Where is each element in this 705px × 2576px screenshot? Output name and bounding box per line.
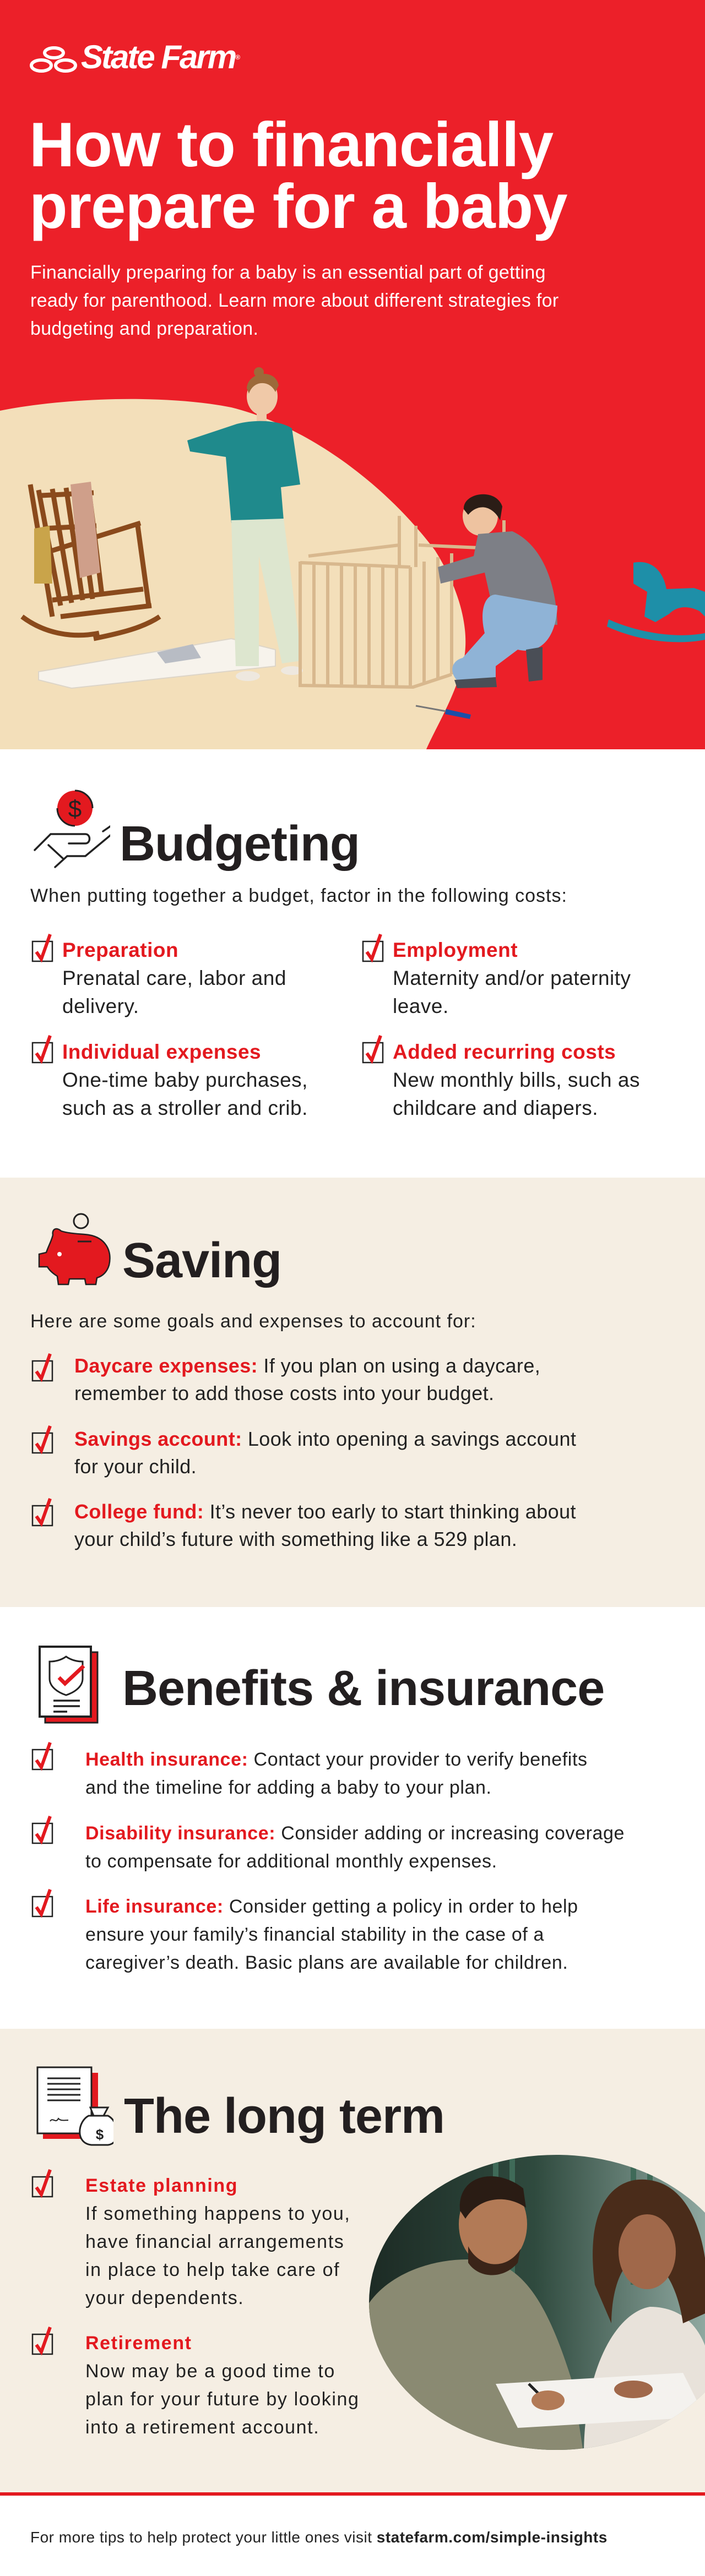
- rocking horse: [633, 562, 705, 622]
- item: retirement: Retirement: [85, 2333, 192, 2354]
- icon: three ovals: [30, 46, 77, 73]
- item: life insurance: [32, 1889, 578, 1973]
- icon: document with money bag: [36, 2067, 113, 2146]
- item: estate planning: your dependents.: [85, 2288, 244, 2308]
- photo: couple planning: [369, 2155, 705, 2450]
- item: daycare: Daycare expenses: If you plan on using a daycare,: [74, 1354, 540, 1377]
- item: disability insurance: to compensate for additional monthly expenses.: [85, 1851, 497, 1872]
- heading: benefits & insurance: Benefits & insurance: [122, 1661, 604, 1716]
- icon: document with money bag: $: [96, 2126, 104, 2143]
- woman: [247, 378, 278, 415]
- item: employment: [362, 934, 631, 1017]
- icon: hand with coin: [34, 789, 110, 868]
- item: college fund: your child’s future with something like a 529 plan.: [74, 1528, 517, 1550]
- intro text: When putting together a budget, factor in the following costs:: [30, 885, 567, 906]
- item: college fund: [32, 1498, 576, 1550]
- item: health insurance: [32, 1742, 588, 1798]
- item: retirement: plan for your future by looking: [85, 2389, 360, 2410]
- item: life insurance: ensure your family’s financial stability in the case of a: [85, 1924, 544, 1945]
- item: individual expenses: such as a stroller and crib.: [62, 1097, 308, 1119]
- panel: the long term: [0, 2029, 705, 2492]
- item: daycare: remember to add those costs into your budget.: [74, 1382, 494, 1404]
- crib: [300, 516, 504, 687]
- item: health insurance: Health insurance: Contact your provider to verify benefits: [85, 1749, 588, 1770]
- icon: document with shield: [39, 1646, 98, 1723]
- item: preparation: [32, 934, 286, 1017]
- item: employment: Maternity and/or paternity: [393, 967, 631, 989]
- item: estate planning: in place to help take care of: [85, 2259, 340, 2280]
- intro text: Here are some goals and expenses to account for:: [30, 1311, 476, 1332]
- title: prepare for a baby: [29, 172, 567, 242]
- heading: saving: Saving: [122, 1233, 281, 1288]
- icon: piggy bank: [39, 1213, 111, 1285]
- item: disability insurance: [32, 1816, 625, 1872]
- item: retirement: Now may be a good time to: [85, 2361, 335, 2382]
- item: employment: leave.: [393, 995, 449, 1017]
- subtitle: [30, 262, 559, 339]
- item: life insurance: Life insurance: Consider getting a policy in order to help: [85, 1896, 578, 1917]
- hero section: [0, 0, 705, 749]
- footer: For more tips to help protect your little ones visit statefarm.com/simple-insights: [30, 2529, 608, 2546]
- heading: the long term: The long term: [124, 2089, 444, 2144]
- item: added recurring costs: childcare and diapers.: [393, 1097, 598, 1119]
- subtitle: Financially preparing for a baby is an essential part of getting: [30, 262, 546, 283]
- item: life insurance: caregiver’s death. Basic plans are available for children.: [85, 1952, 568, 1973]
- panel: budgeting: [0, 749, 705, 1178]
- rocking chair: [22, 483, 160, 639]
- item: retirement: [32, 2327, 360, 2438]
- subtitle: budgeting and preparation.: [30, 318, 258, 339]
- item: estate planning: [32, 2169, 350, 2308]
- panel: saving: [0, 1178, 705, 1607]
- item: individual expenses: Individual expenses: [62, 1041, 261, 1063]
- item: college fund: College fund: It’s never too early to start thinking about: [74, 1500, 576, 1523]
- item: added recurring costs: [362, 1035, 640, 1119]
- item: preparation: delivery.: [62, 995, 139, 1017]
- logo: State Farm®: [81, 39, 240, 75]
- man: [463, 496, 498, 536]
- hero illustration: [0, 367, 705, 749]
- item: preparation: Preparation: [62, 939, 178, 961]
- panel: benefits & insurance: [0, 1607, 705, 2029]
- mattress: [39, 639, 275, 688]
- item: estate planning: have financial arrangements: [85, 2231, 344, 2252]
- item: daycare: [32, 1353, 540, 1404]
- item: savings account: for your child.: [74, 1455, 197, 1478]
- item: savings account: Savings account: Look into opening a savings account: [74, 1428, 576, 1450]
- item: health insurance: and the timeline for adding a baby to your plan.: [85, 1777, 492, 1798]
- item: estate planning: If something happens to you,: [85, 2203, 350, 2224]
- item: disability insurance: Disability insurance: Consider adding or increasing coverage: [85, 1823, 625, 1844]
- icon: hand with coin: $: [68, 796, 82, 823]
- item: added recurring costs: New monthly bills, such as: [393, 1069, 640, 1091]
- item: savings account: [32, 1425, 576, 1478]
- item: preparation: Prenatal care, labor and: [62, 967, 286, 989]
- title: [29, 110, 567, 242]
- heading: budgeting: Budgeting: [120, 816, 360, 872]
- screwdriver: [416, 706, 446, 711]
- subtitle: ready for parenthood. Learn more about different strategies for: [30, 290, 559, 311]
- title: How to financially: [29, 110, 553, 180]
- item: retirement: into a retirement account.: [85, 2417, 319, 2438]
- item: estate planning: Estate planning: [85, 2175, 238, 2196]
- item: added recurring costs: Added recurring costs: [393, 1041, 616, 1063]
- item: individual expenses: [32, 1035, 308, 1119]
- item: individual expenses: One-time baby purchases,: [62, 1069, 308, 1091]
- item: employment: Employment: [393, 939, 518, 961]
